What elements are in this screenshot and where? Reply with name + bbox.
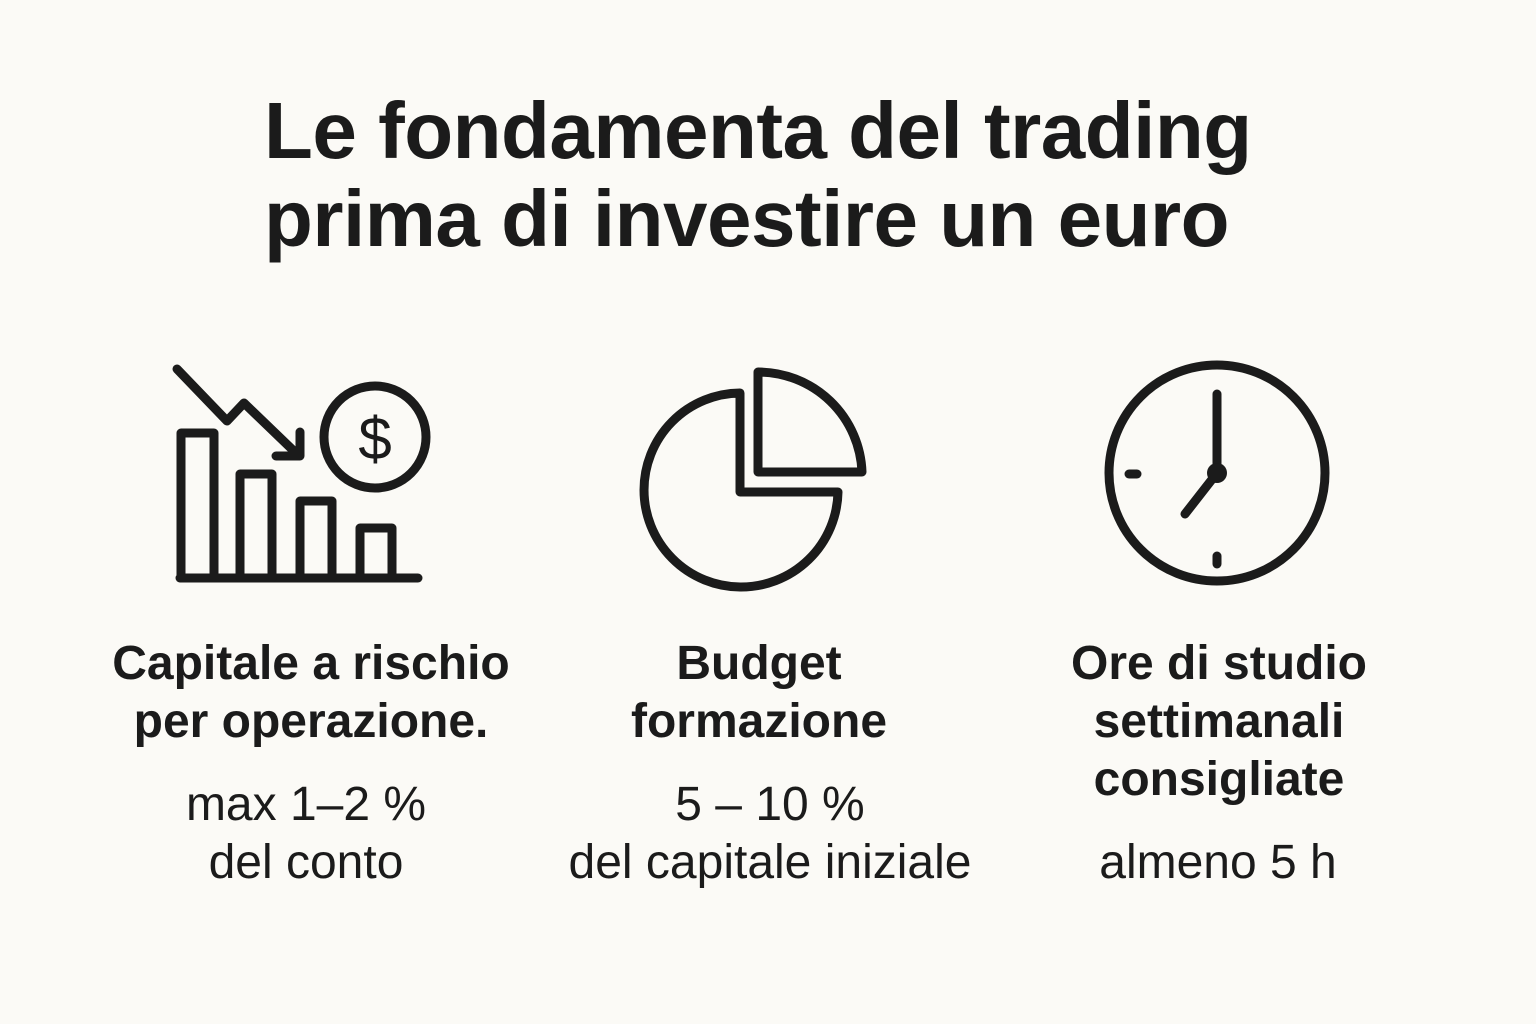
heading: capitale: per operazione. <box>134 695 488 748</box>
heading: ore: settimanali <box>1094 695 1344 748</box>
heading: budget: Budget <box>676 637 842 690</box>
heading: budget: formazione <box>631 695 887 748</box>
heading: ore <box>1071 637 1367 806</box>
icon: falling chart with dollar: $ <box>358 405 392 472</box>
heading: ore: Ore di studio <box>1071 637 1367 690</box>
heading: ore: consigliate <box>1094 753 1344 806</box>
heading: capitale: Capitale a rischio <box>112 637 510 690</box>
value: ore: almeno 5 h <box>1099 836 1337 889</box>
heading: capitale <box>112 637 510 748</box>
title <box>264 86 1252 263</box>
value: capitale <box>186 778 426 889</box>
value: budget <box>569 778 971 889</box>
title: Le fondamenta del trading <box>264 86 1252 175</box>
value: capitale: del conto <box>209 836 403 889</box>
title: prima di investire un euro <box>264 174 1229 263</box>
value: capitale: max 1–2 % <box>186 778 426 831</box>
heading: budget <box>631 637 887 748</box>
value: budget: del capitale iniziale <box>569 836 971 889</box>
value: budget: 5 – 10 % <box>675 778 865 831</box>
